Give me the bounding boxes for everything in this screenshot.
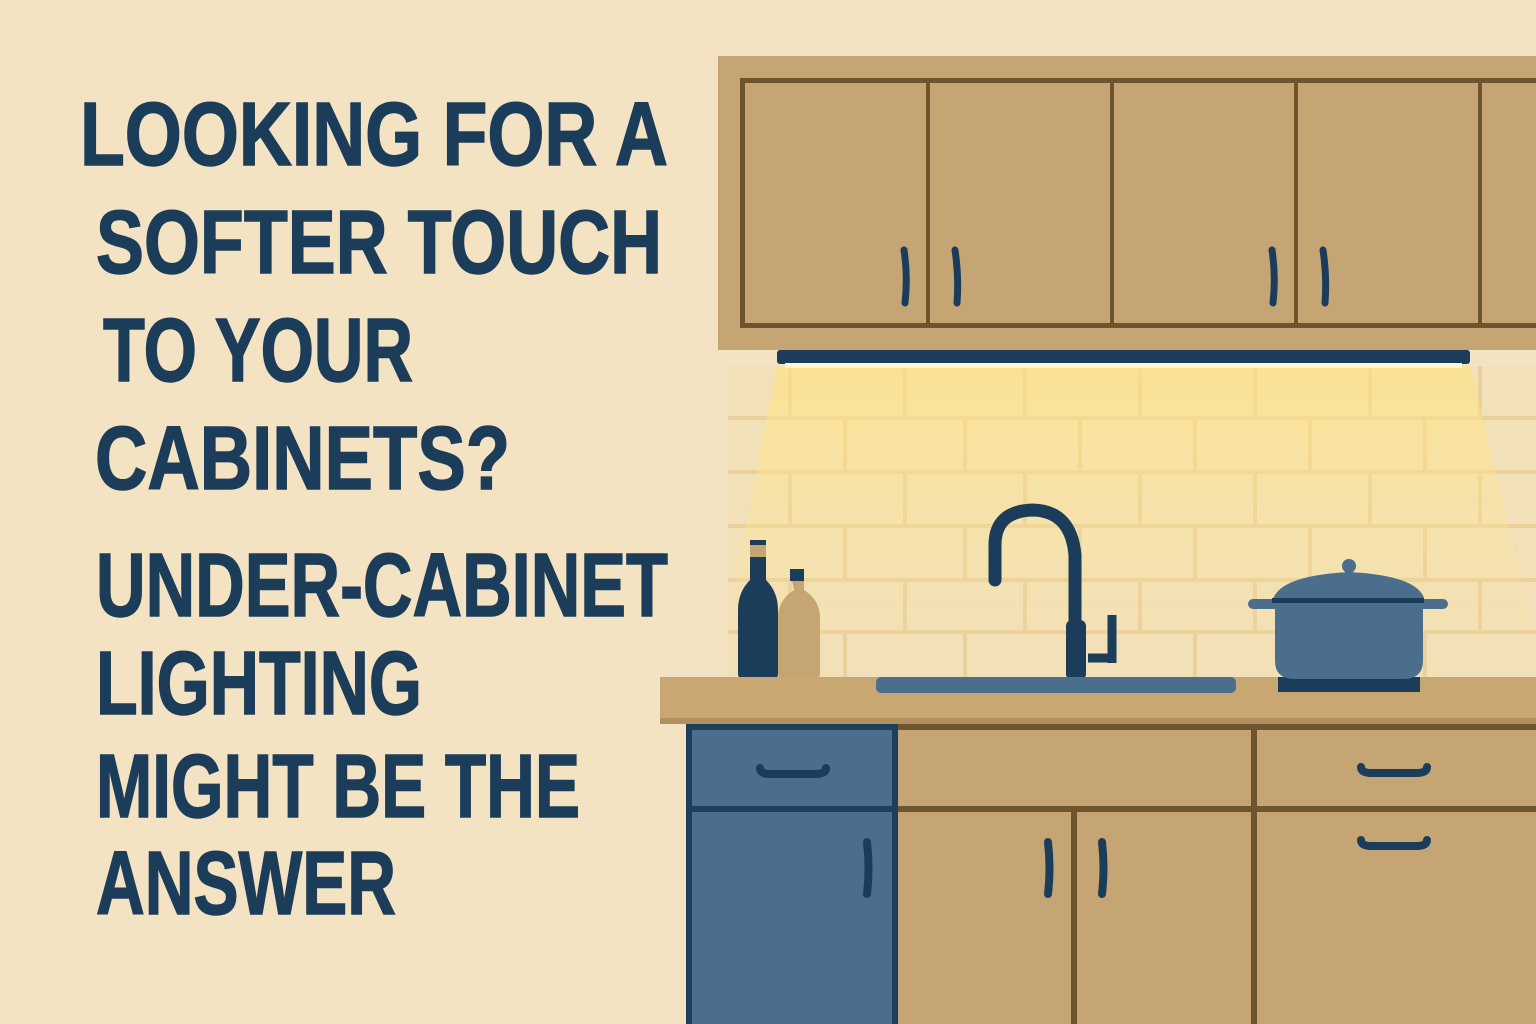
title: question: SOFTER TOUCH <box>96 193 662 293</box>
countertop <box>660 677 1536 724</box>
light bar <box>777 350 1470 368</box>
title: question <box>80 85 668 509</box>
backsplash tiles <box>728 366 1536 678</box>
subtitle: answer: UNDER-CABINET <box>96 536 668 636</box>
lower cabinets <box>686 724 1536 1024</box>
subtitle: answer: LIGHTING <box>96 634 422 734</box>
handles <box>904 250 1326 303</box>
title: question: TO YOUR <box>103 301 413 401</box>
light glow <box>715 366 1536 680</box>
title: question: LOOKING FOR A <box>80 85 668 185</box>
subtitle: answer: MIGHT BE THE <box>96 737 580 837</box>
subtitle: answer: ANSWER <box>96 834 396 934</box>
subtitle: answer <box>96 536 668 934</box>
sink <box>876 677 1236 693</box>
lower handles <box>760 767 1427 894</box>
pot <box>1248 559 1448 692</box>
upper cabinets <box>718 56 1536 350</box>
title: question: CABINETS? <box>95 409 510 509</box>
faucet <box>995 510 1112 680</box>
bottles <box>738 540 820 678</box>
